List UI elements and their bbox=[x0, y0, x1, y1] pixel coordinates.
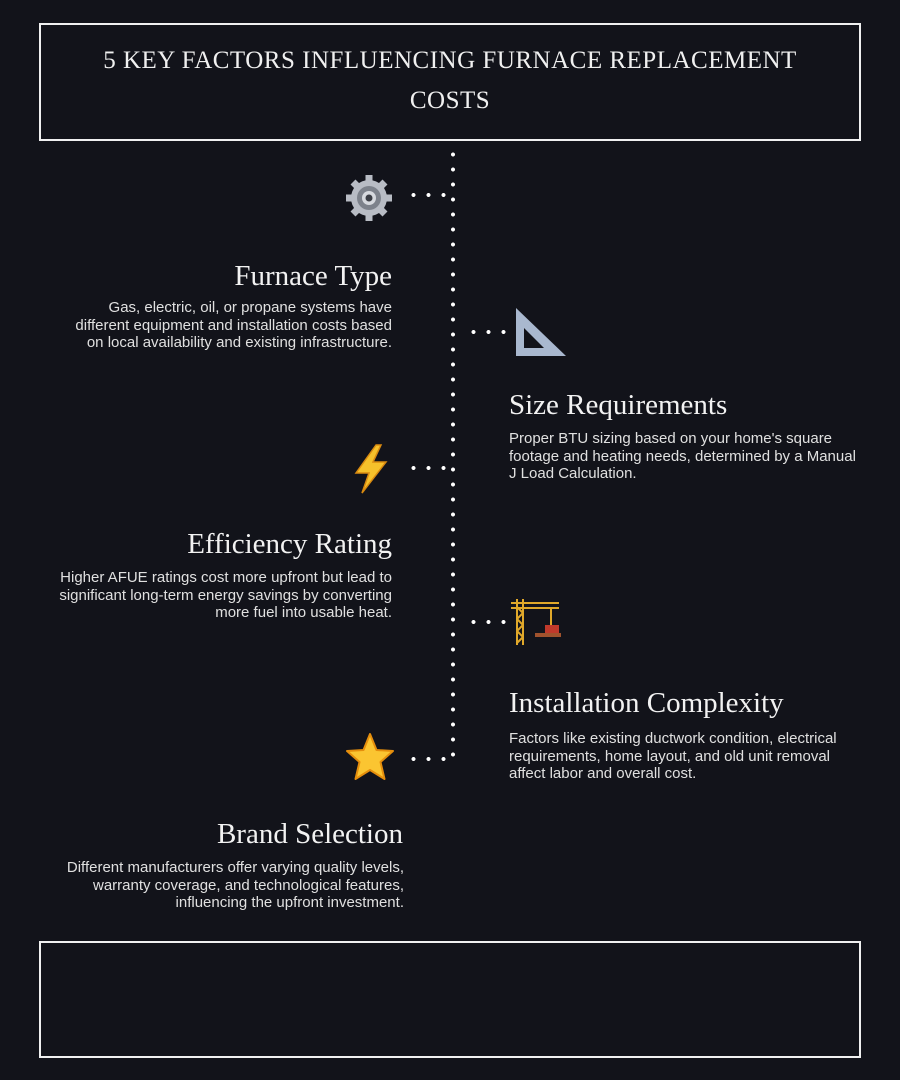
icon: triangle ruler bbox=[516, 308, 566, 356]
text: different equipment and installation costs based bbox=[75, 316, 392, 334]
text: J Load Calculation. bbox=[509, 465, 637, 482]
text: significant long-term energy savings by converting bbox=[59, 586, 392, 604]
text: warranty coverage, and technological features, bbox=[93, 876, 404, 894]
timeline: dotted vertical line bbox=[451, 147, 455, 767]
footer box bbox=[39, 941, 861, 1058]
panel: size requirements: Size Requirements bbox=[509, 389, 727, 421]
panel: installation complexity: Installation Complexity bbox=[509, 687, 784, 719]
text: more fuel into usable heat. bbox=[215, 604, 392, 621]
title: COSTS bbox=[410, 87, 490, 114]
icon: star bbox=[346, 733, 394, 780]
text: Proper BTU sizing based on your home's square bbox=[509, 430, 832, 447]
icon: crane bbox=[511, 599, 561, 645]
connector dots bbox=[406, 193, 451, 197]
title box bbox=[39, 23, 861, 141]
panel: efficiency rating: Efficiency Rating bbox=[187, 528, 392, 560]
text: requirements, home layout, and old unit removal bbox=[509, 748, 830, 764]
title bbox=[103, 47, 797, 114]
text: affect labor and overall cost. bbox=[509, 765, 696, 782]
text: footage and heating needs, determined by a Manual bbox=[509, 448, 856, 464]
icon: gear bbox=[346, 175, 392, 221]
panel: furnace type: Furnace Type bbox=[234, 260, 392, 292]
icon: lightning bbox=[354, 444, 388, 494]
text: influencing the upfront investment. bbox=[176, 894, 404, 911]
text: Higher AFUE ratings cost more upfront but lead to bbox=[60, 569, 392, 586]
text: on local availability and existing infrastructure. bbox=[87, 334, 392, 351]
text: Factors like existing ductwork condition, electrical bbox=[509, 730, 837, 747]
panel: brand selection: Brand Selection bbox=[217, 818, 403, 850]
title: 5 KEY FACTORS INFLUENCING FURNACE REPLACEMENT bbox=[103, 47, 797, 74]
text: Gas, electric, oil, or propane systems have bbox=[109, 299, 392, 316]
text: Different manufacturers offer varying quality levels, bbox=[67, 859, 404, 876]
